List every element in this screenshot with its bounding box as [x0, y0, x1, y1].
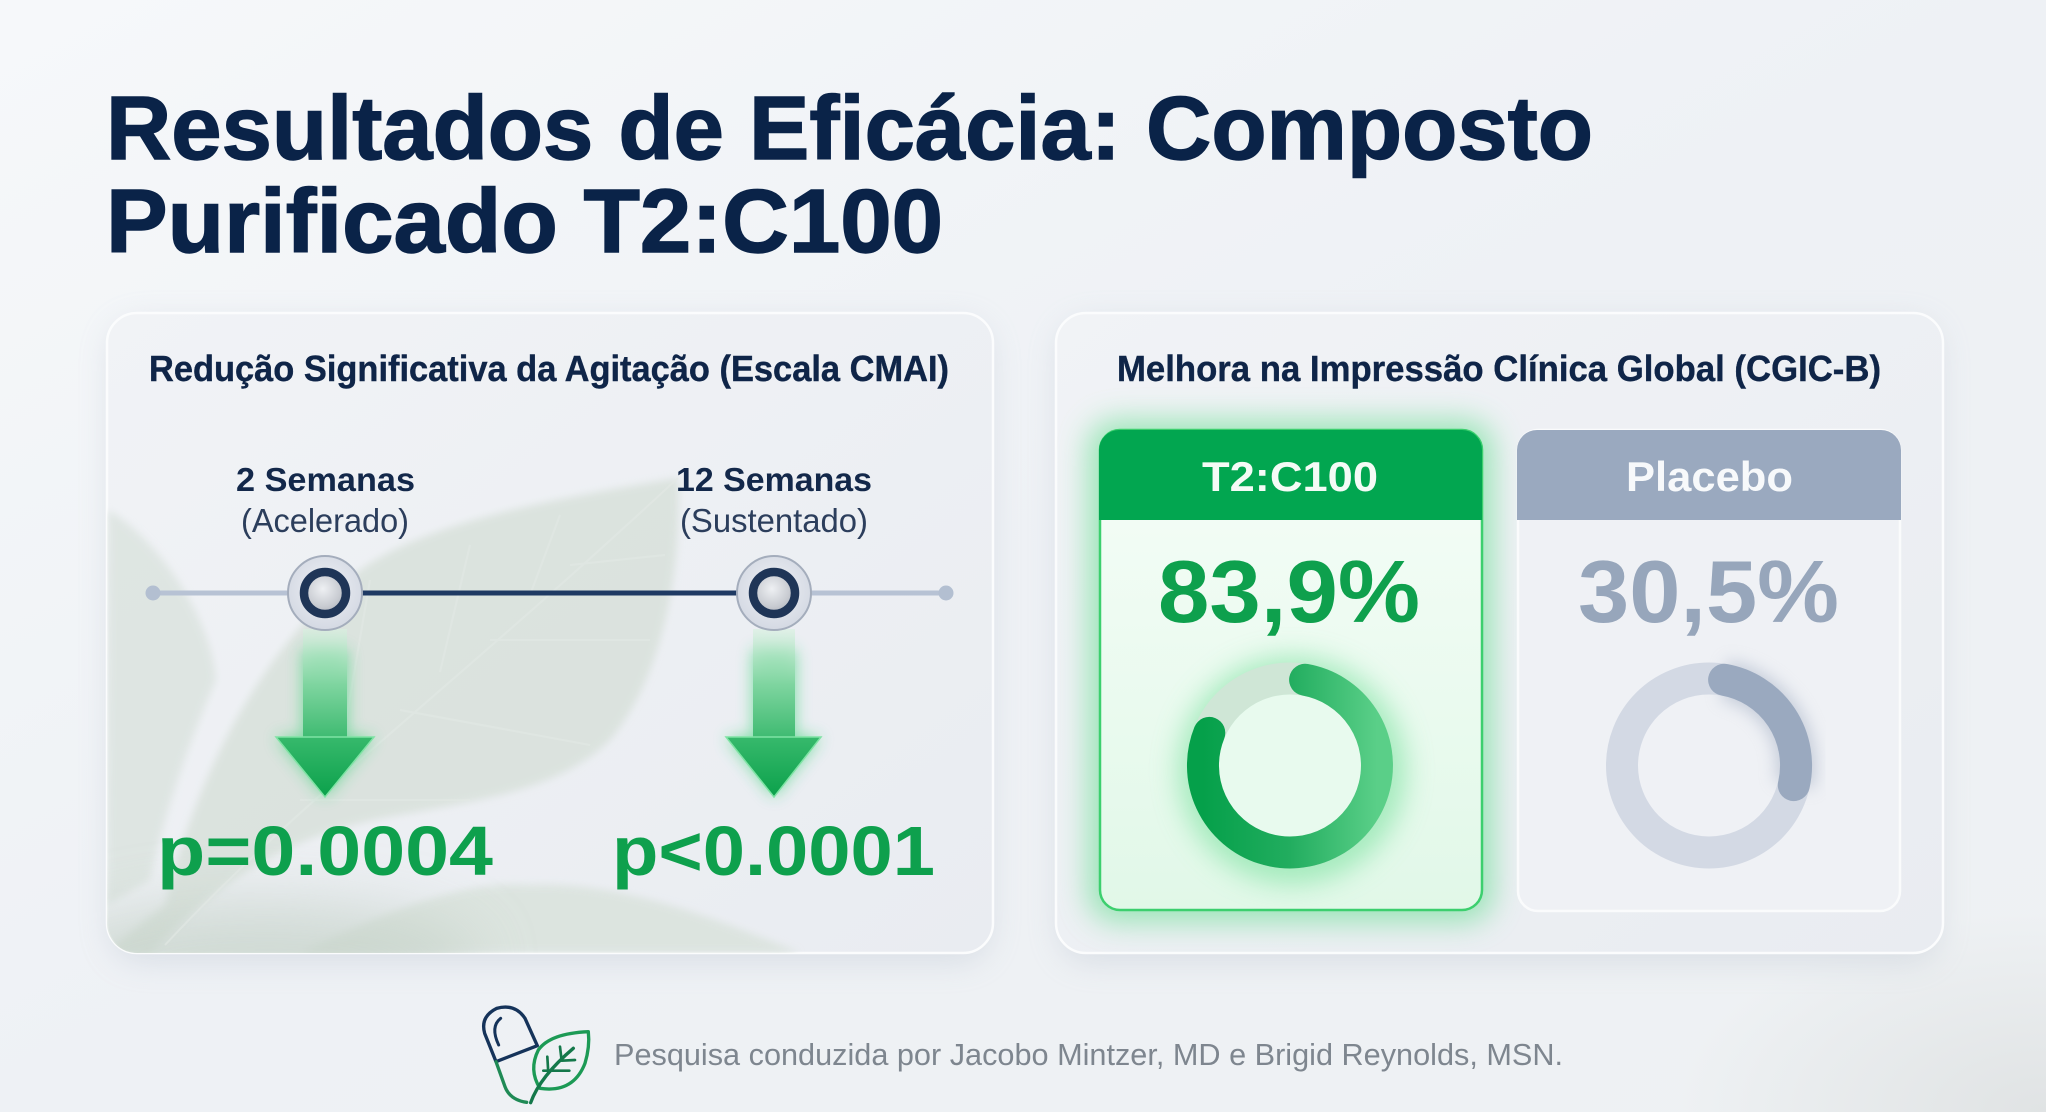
timeline node: 2 weeks: [288, 556, 362, 630]
card: Placebo: [1517, 430, 1901, 911]
panel background: [107, 313, 993, 962]
arrow: 2 weeks: [276, 629, 374, 797]
timeline: [146, 586, 954, 600]
title: [106, 79, 1593, 272]
panel background: [1056, 313, 1943, 962]
p-value: 12 weeks: p<0.0001: [612, 812, 935, 890]
timeline labels: 12 weeks: (Sustentado): [680, 502, 868, 539]
timeline labels: 2 weeks: 2 Semanas: [236, 461, 415, 498]
timeline node: 12 weeks: [737, 556, 811, 630]
donut chart 83.9%: [1196, 674, 1388, 866]
percentage: 30,5%: [1578, 542, 1839, 641]
card header: [1517, 430, 1901, 520]
title: Resultados de Eficácia: Composto: [106, 79, 1593, 179]
card: T2:C100: [1088, 420, 1493, 922]
panel heading: Redução Significativa da Agitação (Escala CMAI): [149, 348, 949, 389]
panel: clinical global impression (CGIC-B): [1056, 313, 1943, 962]
donut chart 30.5%: [1622, 678, 1796, 852]
title: Purificado T2:C100: [106, 172, 943, 272]
card label: Placebo: [1626, 453, 1793, 500]
arrow: 12 weeks: [726, 629, 821, 797]
panel: agitation reduction (CMAI): [104, 312, 996, 966]
timeline labels: 12 weeks: 12 Semanas: [676, 461, 872, 498]
timeline labels: 2 weeks: (Acelerado): [241, 502, 409, 539]
timeline labels: 2 weeks: [236, 461, 415, 539]
icon: capsule and leaf: [484, 1007, 589, 1103]
p-value: 2 weeks: p=0.0004: [157, 812, 493, 890]
footer credit: Pesquisa conduzida por Jacobo Mintzer, MD e Brigid Reynolds, MSN.: [614, 1037, 1563, 1072]
timeline labels: 12 weeks: [676, 461, 872, 539]
panel heading: Melhora na Impressão Clínica Global (CGIC-B): [1117, 348, 1881, 389]
card header: [1099, 430, 1482, 520]
percentage: 83,9%: [1158, 542, 1420, 641]
card label: T2:C100: [1202, 453, 1378, 500]
decorative leaves: [107, 478, 792, 953]
